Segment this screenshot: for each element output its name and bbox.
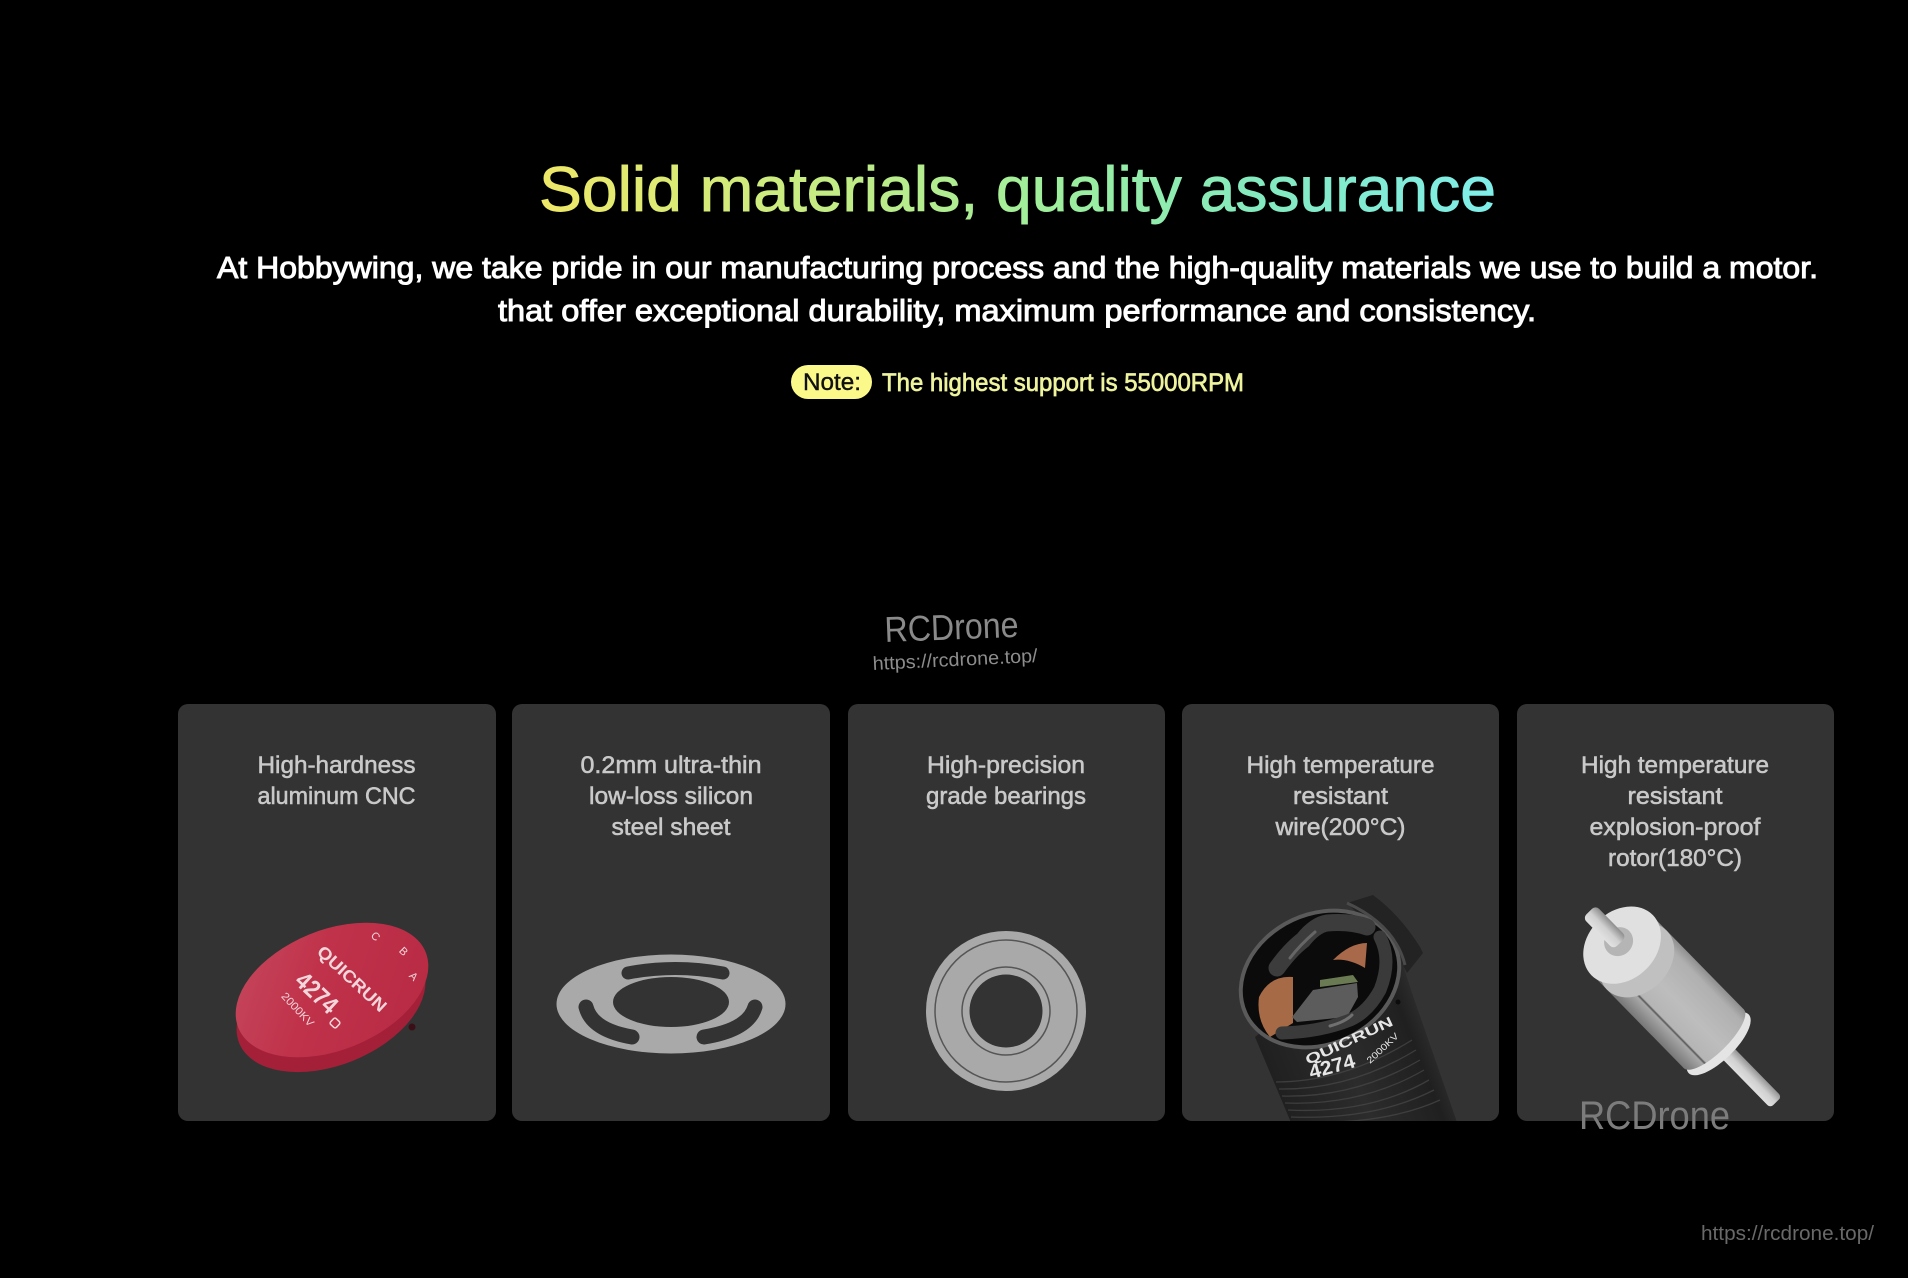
panel: bearings	[848, 704, 1165, 1121]
icon: motor with windings	[1238, 895, 1456, 1121]
heading: silicon steel sheet: steel sheet	[612, 814, 731, 841]
center watermark	[872, 604, 1039, 675]
heading: silicon steel sheet: low-loss silicon	[589, 783, 753, 810]
center watermark: https://rcdrone.top/	[872, 646, 1039, 675]
intro text: At Hobbywing, we take pride in our manufacturing process and the high-quality materials we use to build a motor.	[217, 250, 1818, 285]
icon: motor with windings: 2000KV	[1365, 1031, 1401, 1065]
center watermark: RCDrone	[884, 604, 1019, 650]
heading: aluminum CNC: High-hardness	[258, 752, 416, 779]
icon: rotor	[1558, 881, 1807, 1132]
panel: high temperature wire	[1182, 704, 1499, 1125]
icon: red aluminum end cap: 2000KV	[278, 991, 316, 1030]
note callout	[791, 365, 1244, 399]
heading: silicon steel sheet	[580, 752, 762, 841]
watermark: card: RCDrone	[1579, 1094, 1730, 1138]
heading: silicon steel sheet: 0.2mm ultra-thin	[580, 752, 762, 779]
heading: aluminum CNC	[258, 752, 416, 810]
heading: aluminum CNC: aluminum CNC	[258, 783, 416, 810]
icon: motor with windings: QUICRUN	[1303, 1013, 1395, 1068]
heading: high temperature wire: High temperature	[1246, 752, 1434, 779]
note callout: The highest support is 55000RPM	[882, 369, 1244, 397]
heading: bearings: grade bearings	[926, 783, 1086, 810]
heading: explosion-proof rotor: rotor(180°C)	[1608, 845, 1742, 872]
icon: red aluminum end cap: A	[406, 970, 420, 984]
icon: motor with windings: 4274	[1307, 1050, 1359, 1084]
corner watermark url: https://rcdrone.top/	[1701, 1223, 1874, 1245]
icon: bearing	[926, 931, 1086, 1091]
icon: red aluminum end cap: C	[368, 930, 382, 944]
heading: bearings: High-precision	[927, 752, 1085, 779]
heading: explosion-proof rotor: High temperature	[1581, 752, 1769, 779]
infographic canvas	[178, 164, 1874, 1244]
icon: red aluminum end cap: QUICRUN	[313, 942, 390, 1016]
heading: explosion-proof rotor: explosion-proof	[1590, 814, 1761, 841]
intro text: that offer exceptional durability, maximum performance and consistency.	[498, 293, 1536, 328]
heading: explosion-proof rotor: resistant	[1628, 783, 1723, 810]
heading: explosion-proof rotor	[1581, 752, 1769, 872]
panel: explosion-proof rotor	[1517, 704, 1834, 1138]
intro text	[217, 250, 1818, 328]
heading: bearings	[926, 752, 1086, 810]
heading: high temperature wire: wire(200°C)	[1274, 814, 1406, 841]
panel: aluminum CNC	[178, 704, 496, 1121]
icon: red aluminum end cap: B	[396, 945, 410, 959]
heading: high temperature wire	[1246, 752, 1434, 841]
icon: red aluminum end cap	[216, 897, 448, 1098]
icon: silicon steel lamination	[556, 954, 786, 1054]
title: Solid materials, quality assurance	[539, 155, 1496, 225]
icon: red aluminum end cap: 4274	[289, 967, 344, 1020]
heading: high temperature wire: resistant	[1293, 783, 1388, 810]
note callout: Note:	[803, 369, 861, 396]
panel: silicon steel sheet	[512, 704, 830, 1121]
